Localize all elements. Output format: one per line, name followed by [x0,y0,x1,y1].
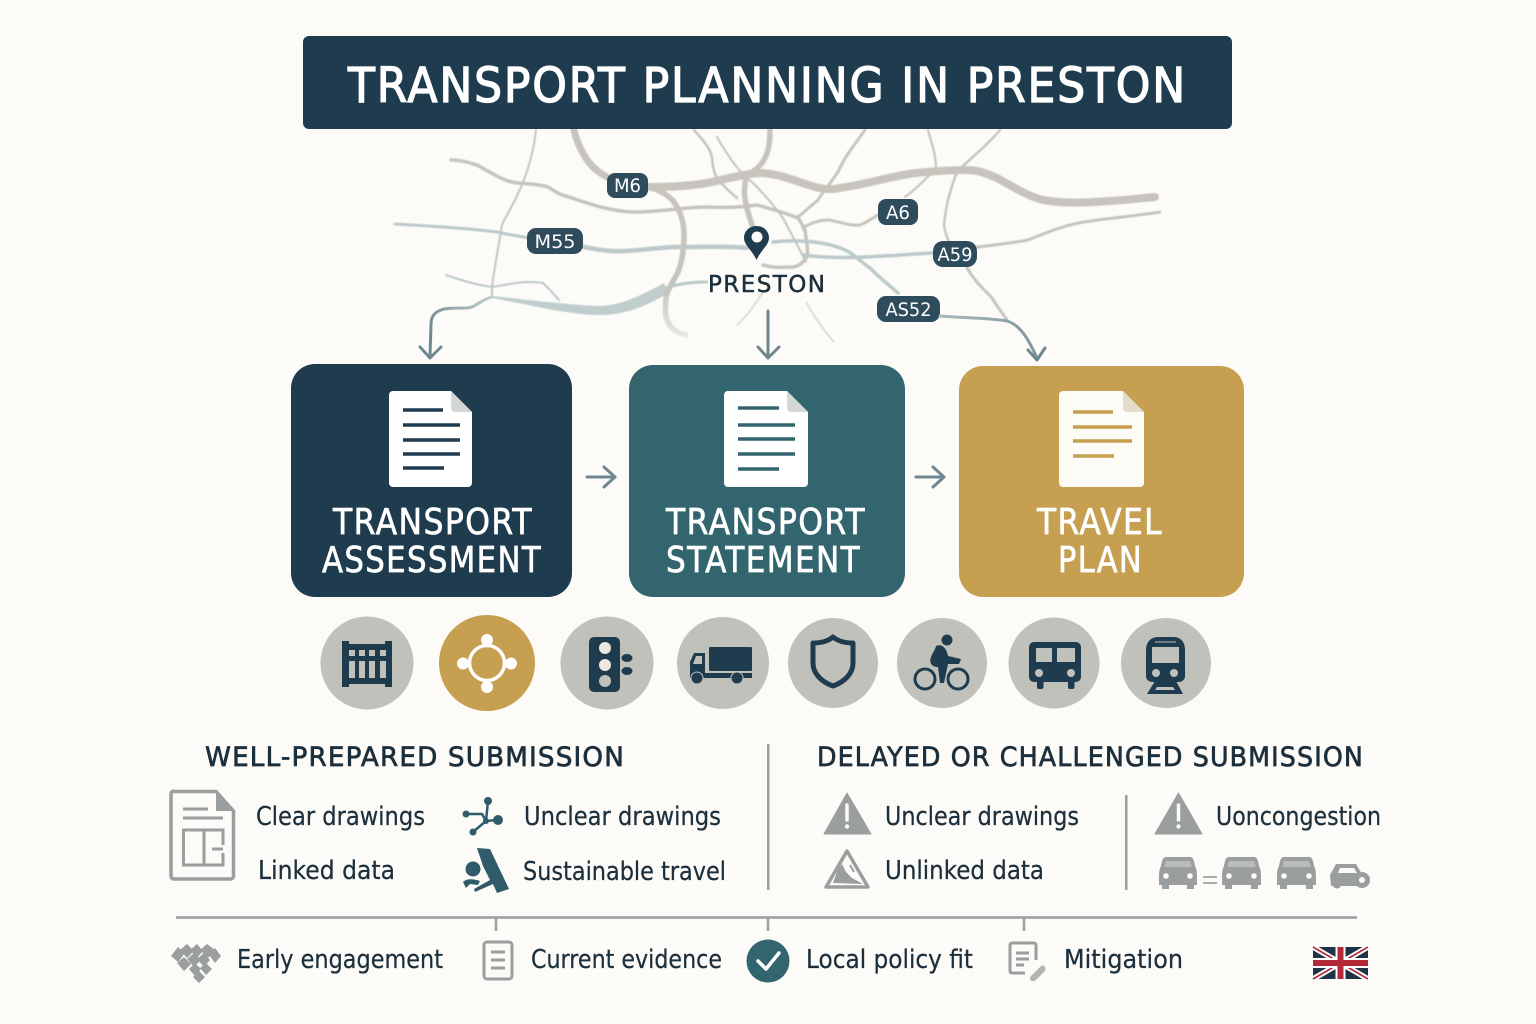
road label: AS52 [877,296,940,322]
label [322,502,542,581]
icon: document [724,391,808,487]
icon: lorry [677,617,769,709]
icon: safety shield [788,618,878,708]
label: PLAN [1058,540,1143,581]
panel: delayed or challenged submission [817,742,1381,890]
label: TRAVEL [1036,502,1163,543]
icon: train [1121,618,1211,708]
icon: warning triangle [824,793,871,834]
item: unclear drawings: Unclear drawings [524,802,721,832]
label: TRANSPORT [332,502,533,543]
item: clear drawings: Clear drawings [256,802,425,832]
arrow: statement to travel plan [916,467,944,487]
icon: warning triangle [1155,793,1202,834]
road label: M55 [527,228,583,254]
arrow: map to transport statement [758,311,779,358]
road label: M6 [607,173,648,198]
road map of Preston [395,130,1160,342]
item: unlinked data: Unlinked data [885,856,1044,886]
panel: well-prepared submission [171,742,726,893]
item: congestion: Uoncongestion [1216,802,1381,832]
icon: junction grid [320,616,414,710]
icon: site plan document [171,791,234,879]
footer strip: key actions [171,940,1368,983]
icon: document [1059,391,1144,487]
icon: document [389,391,472,487]
panel: transport statement [629,365,905,597]
section divider [767,744,770,890]
heading: WELL-PREPARED SUBMISSION [205,742,625,773]
icon: queue of cars [1159,857,1370,889]
title banner: TRANSPORT PLANNING IN PRESTON [347,58,1187,114]
arrow: map to travel plan [940,316,1045,360]
road label: A6 [878,199,918,225]
road label: M55: M55 [534,231,576,253]
heading: DELAYED OR CHALLENGED SUBMISSION [817,742,1364,773]
timeline rule [176,917,1357,931]
panel: transport assessment [291,364,572,597]
road label: M6: M6 [614,175,641,197]
road label: A59: A59 [938,244,972,266]
label: TRANSPORT [665,502,866,543]
icon: union flag [1313,947,1368,979]
city label: Preston: PRESTON [708,272,825,298]
icon: map pin [744,226,769,260]
icon: traffic signal [560,616,654,710]
item: unclear drawings: Unclear drawings [885,802,1079,832]
icon: hazard triangle [826,851,868,887]
icon: mitigation document and pen [1010,943,1045,981]
icon: cyclist [897,618,987,708]
road label: A6: A6 [886,202,910,224]
item: current evidence: Current evidence [531,945,722,975]
icon: handshake [171,944,221,983]
icon: roundabout [439,615,535,711]
icon: check badge [746,940,790,982]
column divider [1125,795,1128,890]
road label: AS52: AS52 [886,299,932,321]
item: local policy fit: Local policy fit [806,945,973,975]
item: linked data: Linked data [258,856,395,886]
arrow: map to transport assessment [420,297,492,358]
icon row: transport topics [320,615,1211,711]
label: STATEMENT [666,540,861,581]
label [665,502,866,581]
icon: evidence document [484,942,512,979]
item: sustainable travel: Sustainable travel [523,857,726,887]
item: early engagement: Early engagement [237,945,443,975]
arrow: assessment to statement [587,467,615,487]
icon: bus [1008,618,1100,708]
panel: travel plan [959,366,1244,597]
icon: network nodes [462,797,503,836]
label [1036,502,1163,581]
item: mitigation: Mitigation [1064,945,1183,975]
icon: sustainable travel [463,848,509,893]
title banner [303,36,1232,129]
label: ASSESSMENT [322,540,542,581]
